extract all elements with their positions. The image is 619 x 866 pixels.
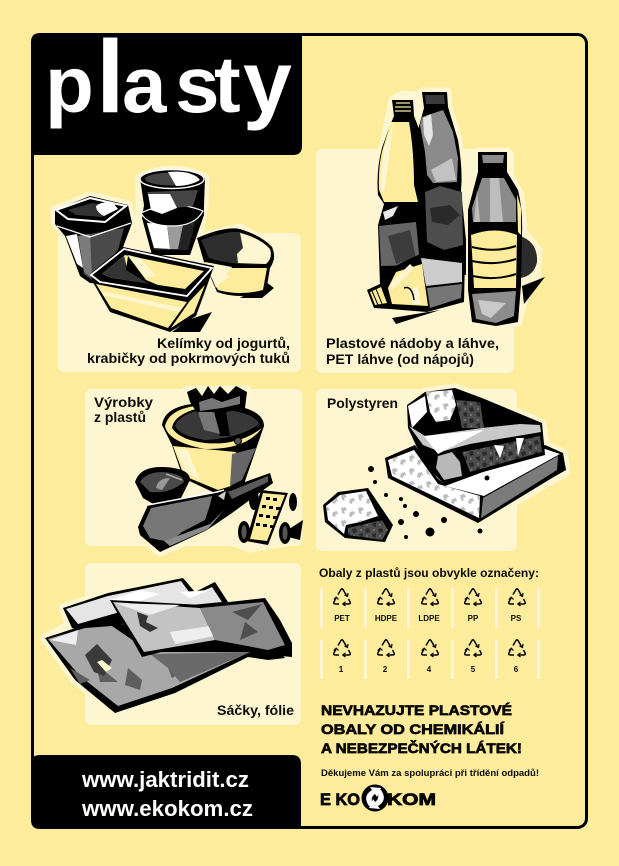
icon: PET (334, 589, 350, 623)
icon: LDPE: LDPE (418, 614, 440, 623)
icon: green dot logo (362, 784, 388, 812)
title: l (96, 19, 125, 134)
warning text: A NEBEZPEČNÝCH LÁTEK! (321, 739, 522, 756)
illustration: plastic bottles (365, 92, 545, 326)
icon: code 4: 4 (427, 665, 432, 674)
header block with title (31, 19, 302, 155)
icon: code 2: 2 (383, 665, 388, 674)
caption: polystyrene: Polystyren (327, 395, 398, 411)
icon: PS: PS (511, 614, 522, 623)
icon: rake (187, 386, 247, 436)
title: s (175, 40, 220, 129)
title: a (122, 40, 167, 129)
halo (45, 578, 292, 713)
halo (55, 170, 275, 332)
icon: yellow bottle (378, 100, 430, 285)
icon: left yogurt cup (55, 196, 132, 284)
recycling codes heading: Obaly z plastů jsou obvykle označeny: (319, 568, 539, 580)
panel: bags background (85, 563, 301, 725)
title: p (45, 40, 94, 129)
icon: toy car (238, 490, 303, 545)
illustration: yogurt cups and tubs (55, 170, 275, 332)
panel: polystyrene background (316, 389, 517, 551)
icon: right yellow bowl (197, 228, 274, 298)
caption: products (94, 394, 153, 425)
icon: code 2 (378, 640, 394, 674)
caption: bottles: Plastové nádoby a láhve, (326, 335, 499, 351)
url 1: www.jaktridit.cz (81, 767, 249, 792)
caption: bottles (326, 335, 499, 367)
icon: LDPE (418, 589, 440, 623)
caption: yogurt: Kelímky od jogurtů, (157, 335, 290, 351)
title: t (214, 40, 241, 129)
icon: small chunk (323, 488, 393, 542)
icon: bucket (162, 403, 264, 494)
icon: yellow margarine tub (90, 247, 214, 332)
logo: EKOKOM (320, 784, 436, 812)
panel: yogurt background (58, 233, 301, 372)
icon: lower bag (45, 623, 285, 713)
illustration: plastic toys (135, 386, 303, 552)
icon: code 6: 6 (514, 665, 519, 674)
icon: stacked centre cups (140, 170, 205, 255)
caption: products: z plastů (94, 409, 146, 425)
url 2: www.ekokom.cz (81, 796, 253, 821)
crumbs (368, 466, 490, 539)
icon: PET: PET (334, 614, 350, 623)
icon: PP (465, 589, 481, 623)
warning text: OBALY OD CHEMIKÁLIÍ (321, 721, 505, 737)
halo (135, 390, 298, 552)
thank you note: Děkujeme Vám za spolupráci při třídění odpadů! (321, 768, 539, 779)
icon: small cup (135, 467, 190, 505)
icon: code 6 (509, 640, 525, 674)
title: y (243, 32, 292, 131)
icon: code 1 (334, 640, 350, 674)
icon: HDPE: HDPE (375, 614, 398, 623)
icon: HDPE (375, 589, 398, 623)
warning text (321, 702, 522, 756)
icon: lower block (385, 445, 566, 523)
icon: code 5 (465, 640, 481, 674)
caption: products: Výrobky (94, 394, 153, 410)
logo: EKOKOM: KOM (387, 790, 436, 809)
warning text: NEVHAZUJTE PLASTOVÉ (321, 702, 512, 718)
caption: yogurt: krabičky od pokrmových tuků (87, 350, 290, 366)
caption: bottles: PET láhve (od nápojů) (326, 351, 474, 367)
illustration: polystyrene blocks (323, 388, 566, 542)
icon: code 5: 5 (471, 665, 476, 674)
icon: code 1: 1 (339, 665, 344, 674)
footer block with URLs (31, 755, 301, 829)
icon: code 4 (422, 640, 438, 674)
icon: right PET bottle (468, 152, 545, 326)
icon: PS (509, 589, 525, 623)
icon: back bag (63, 578, 228, 632)
recycling codes table (320, 588, 540, 679)
icon: gray bottle (418, 92, 466, 275)
icon: upper bag (110, 598, 292, 657)
icon: shovel (138, 473, 273, 552)
panel: bottles background (316, 149, 514, 373)
icon: crushed bottle (367, 254, 465, 324)
halo (365, 92, 538, 326)
halo (385, 388, 566, 523)
icon: upper block (407, 388, 545, 483)
caption: bags: Sáčky, fólie (217, 702, 294, 718)
caption: yogurt (87, 335, 290, 366)
logo: EKOKOM: E KO (320, 790, 360, 809)
icon: PP: PP (468, 614, 479, 623)
illustration: plastic bags (45, 578, 292, 713)
panel: plastic products background (85, 389, 302, 546)
